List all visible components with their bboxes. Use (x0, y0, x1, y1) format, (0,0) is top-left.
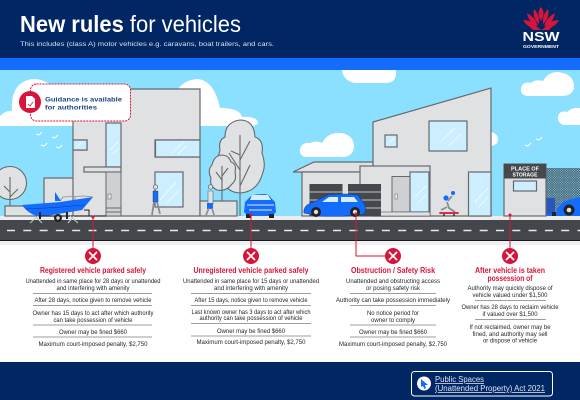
panel: registered vehicle: Registered vehicle parked safely (40, 266, 146, 275)
callout: guidance (19, 84, 130, 121)
building 2 (293, 88, 491, 216)
panel: unregistered vehicle: authority can take possession of vehicle (200, 315, 303, 322)
header band (0, 0, 580, 58)
sky background (0, 70, 580, 220)
connector 4 and marker (502, 214, 518, 264)
title: New rules for vehicles (20, 11, 241, 37)
panel: obstruction: Unattended and obstructing access (346, 278, 440, 285)
panel: obstruction: or posing safety risk (366, 285, 421, 292)
panel: after possession: If not reclaimed, owner may be (470, 324, 551, 331)
panel: registered vehicle: Owner has 15 days to act after which authority (32, 310, 154, 317)
building 1 (73, 89, 200, 216)
person walking 2 (206, 185, 214, 215)
panel: unregistered vehicle: and interfering with amenity (214, 285, 289, 292)
panel: after possession: possession of (488, 274, 533, 283)
panel: after possession: fined, and authority may sell (472, 331, 548, 338)
callout: guidance: for authorities (45, 104, 97, 112)
panel: obstruction: No notice period for (367, 310, 419, 317)
footer link button: (Unattended Property) Act 2021 (435, 384, 545, 393)
panel: registered vehicle: Maximum court-imposed penalty, $2,750 (38, 341, 148, 348)
birds (36, 132, 542, 148)
panel: after possession: Owner has 28 days to reclaim vehicle (462, 304, 559, 311)
panel: obstruction: Maximum court-imposed penalty, $2,750 (339, 341, 448, 348)
garage doors (309, 184, 381, 216)
panel: registered vehicle: Unattended in same place for 28 days or unattended (26, 278, 161, 285)
subtitle: This includes (class A) motor vehicles e.g. caravans, boat trailers, and cars. (20, 41, 274, 48)
panel: registered vehicle: Owner may be fined $660 (59, 329, 128, 336)
panel: registered vehicle: and interfering with amenity (56, 285, 130, 292)
logo: NSW Government: GOVERNMENT (523, 44, 560, 49)
pavement (0, 216, 580, 220)
place of storage building: PLACE OF (511, 166, 540, 172)
panel: obstruction: Obstruction / Safety Risk (351, 266, 435, 275)
panel: unregistered vehicle (183, 266, 320, 346)
connector 3 and marker (354, 212, 401, 264)
trees and low wall (200, 120, 264, 216)
panel: registered vehicle: After 28 days, notice given to remove vehicle (34, 297, 152, 304)
panel: unregistered vehicle: Last known owner has 3 days to act after which (192, 309, 311, 316)
panel: after possession: if valued over $1,500 (482, 311, 538, 318)
connector 1 and marker (85, 216, 101, 264)
callout: guidance: Guidance is available (45, 96, 122, 104)
panel: unregistered vehicle: After 15 days, notice given to remove vehicle (194, 297, 308, 304)
clouds (0, 70, 580, 157)
left tree and wall (0, 166, 75, 216)
panel: obstruction: owner to comply (371, 317, 416, 324)
fence (546, 168, 580, 216)
panel: after possession: Authority may quickly dispose of (468, 285, 553, 292)
panel: unregistered vehicle: Maximum court-imposed penalty, $2,750 (196, 339, 306, 346)
panel: unregistered vehicle: Owner may be fined $660 (217, 328, 286, 335)
boat on trailer (22, 192, 106, 223)
logo: NSW Government (522, 7, 560, 49)
panel: after possession (462, 266, 559, 344)
blue stripe (0, 58, 580, 70)
panel: after possession: After vehicle is taken (475, 266, 545, 275)
panel: after possession: or dispose of vehicle (483, 338, 538, 344)
footer link button: Public Spaces (435, 375, 484, 384)
panel: obstruction (336, 266, 451, 348)
place of storage building (504, 164, 546, 216)
logo: NSW Government: NSW (522, 29, 560, 44)
road (0, 220, 580, 245)
blue car front view (244, 194, 276, 218)
footer link button (412, 372, 552, 396)
footer band (0, 362, 580, 400)
person walking 1 (152, 185, 160, 215)
skateboarder (440, 191, 458, 216)
place of storage building: STORAGE (512, 172, 538, 178)
panel: after possession: vehicle valued under $1,500 (472, 292, 548, 299)
panel: obstruction: Owner may be fined $660 (359, 329, 428, 336)
panel: registered vehicle: can take possession of vehicle (54, 317, 133, 324)
blue car on driveway (304, 194, 365, 217)
panel: obstruction: Authority can take possession immediately (336, 297, 451, 304)
panel: unregistered vehicle: Unattended in same place for 15 days or unattended (183, 278, 320, 285)
connector 2 and marker (243, 214, 259, 264)
panel: unregistered vehicle: Unregistered vehicle parked safely (194, 266, 309, 275)
panel: registered vehicle (26, 266, 161, 348)
